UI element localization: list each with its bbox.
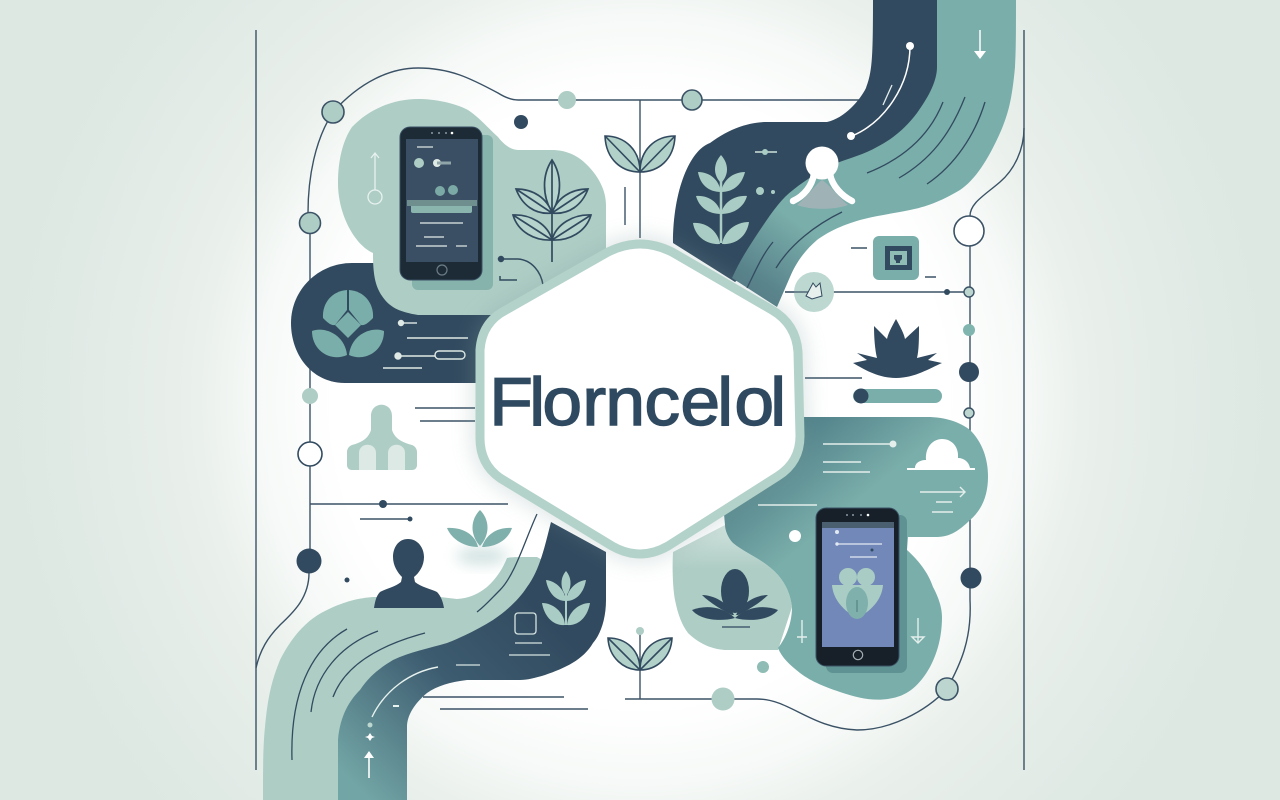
phone: bottom right: [816, 508, 899, 666]
white marks and arrow: [364, 667, 438, 778]
icon: sprout bottom: [608, 627, 672, 670]
icon: leaves on navy: [693, 155, 749, 244]
connector lines: [256, 68, 1024, 730]
title: Florncelol: [489, 364, 786, 440]
slider bar: [853, 388, 942, 404]
panel: bottom right blob: [673, 417, 988, 700]
ribbon curves: [292, 514, 537, 760]
panel: left navy blob: [291, 263, 510, 383]
icon: square badge: [851, 236, 936, 280]
small dots and slider on navy: [755, 149, 777, 195]
icon: person: [374, 539, 444, 608]
white arc line: [847, 42, 914, 140]
icon: pin arrow: [368, 153, 382, 204]
text lines on navy: [383, 320, 468, 368]
small connector curve: [498, 256, 543, 285]
right side nodes: [944, 216, 984, 588]
text lines on blob: [758, 444, 965, 643]
icon: leaves on ribbon: [542, 571, 590, 625]
icon: lotus emblem: [312, 290, 384, 357]
ribbon: bottom left: [263, 514, 606, 800]
icon: sprout top: [605, 136, 675, 172]
list icon on ribbon: [456, 613, 550, 665]
phone shadow: [826, 515, 907, 673]
vertical frame lines: [256, 30, 1024, 770]
node dots: [296, 90, 702, 582]
phone: top left: [400, 127, 482, 280]
bottom nodes: [712, 661, 958, 710]
icon: outlined leaf plant: [513, 160, 591, 262]
icon: small leaf: [447, 510, 512, 565]
icon: small badge circle: [785, 272, 834, 312]
ribbon curves: [747, 97, 985, 288]
icon: building figure: [347, 405, 417, 470]
icon: down arrow: [974, 30, 986, 59]
icon: navy lotus right: [853, 319, 942, 378]
phone shadow: [412, 135, 493, 290]
icon: figure with gray chest: [793, 146, 852, 209]
center hexagon: [480, 244, 800, 554]
icon: cloud: [907, 439, 975, 469]
ribbon: top right: [673, 0, 1016, 307]
icon: navy lotus: [692, 569, 778, 627]
panel: top left mint blob: [338, 99, 606, 315]
